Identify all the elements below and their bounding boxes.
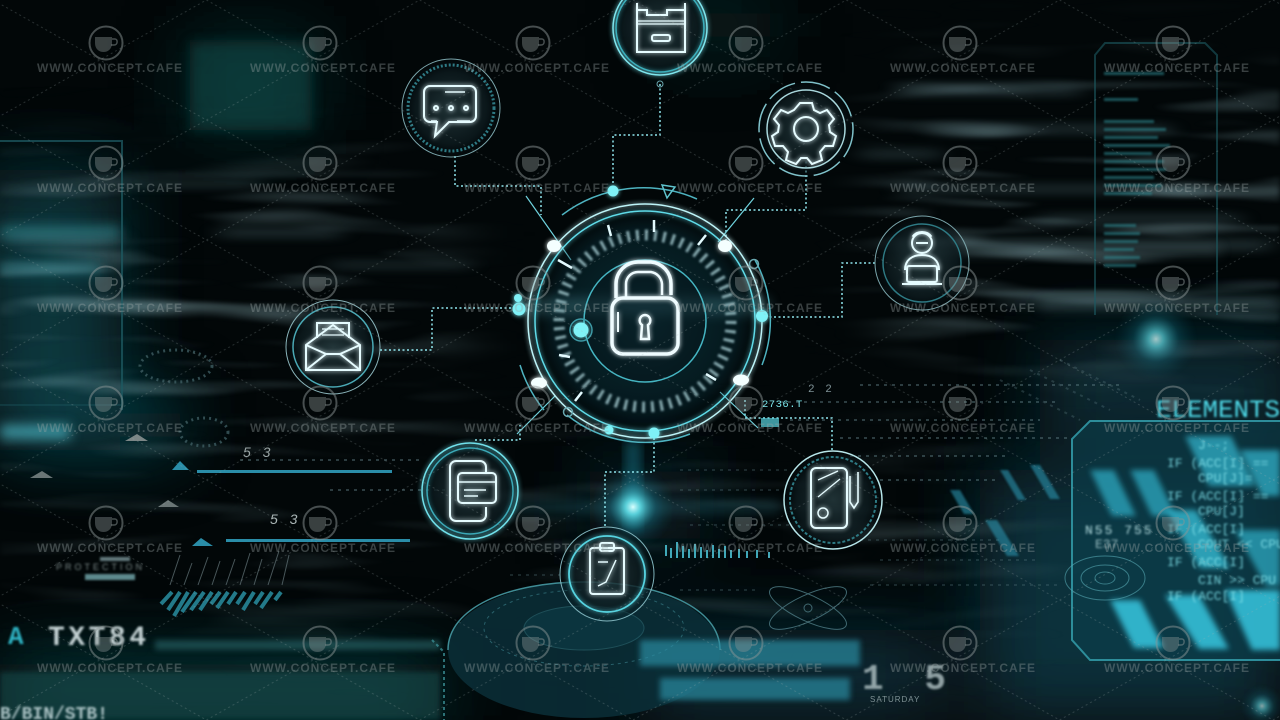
node: drawer cabinet icon	[611, 0, 709, 87]
watermark grid: WWW.CONCEPT.CAFE	[677, 181, 823, 195]
node: gear icon	[759, 82, 853, 176]
watermark grid: WWW.CONCEPT.CAFE	[250, 421, 396, 435]
watermark grid: WWW.CONCEPT.CAFE	[464, 301, 610, 315]
watermark grid: WWW.CONCEPT.CAFE	[37, 541, 183, 555]
code lines: CPU[J]	[1198, 504, 1245, 519]
horizontal glow streak	[520, 298, 770, 314]
outer rings	[528, 204, 762, 438]
chart: bottom bar strips	[640, 542, 860, 700]
code lines: IF (ACC[I]	[1167, 522, 1245, 537]
label: TXT84	[8, 622, 146, 654]
gauge: radial dial	[140, 350, 228, 446]
panel: top right code column	[1095, 43, 1217, 315]
watermark grid: WWW.CONCEPT.CAFE	[1104, 61, 1250, 75]
panel frame	[1072, 421, 1280, 660]
radar circles	[1065, 556, 1145, 600]
partial outer arcs	[520, 188, 770, 442]
panel: lower left gauges	[30, 350, 410, 616]
panel: left edge frame	[0, 141, 122, 410]
icon: atom outline	[764, 578, 852, 638]
connectors: dotted lines	[380, 84, 875, 526]
triangle marker	[662, 185, 675, 198]
watermark grid: WWW.CONCEPT.CAFE	[890, 301, 1036, 315]
watermark grid: WWW.CONCEPT.CAFE	[890, 421, 1036, 435]
lock icon	[612, 262, 678, 354]
node: phone with tools icon	[784, 451, 882, 549]
code lines: E37	[1095, 537, 1118, 552]
watermark grid: WWW.CONCEPT.CAFE	[1104, 301, 1250, 315]
watermark grid: WWW.CONCEPT.CAFE	[37, 301, 183, 315]
watermark grid: WWW.CONCEPT.CAFE	[250, 301, 396, 315]
watermark grid: WWW.CONCEPT.CAFE	[464, 541, 610, 555]
watermark grid: WWW.CONCEPT.CAFE	[37, 421, 183, 435]
code lines	[1085, 438, 1280, 604]
fine HUD readout rows lower middle	[240, 360, 1140, 590]
watermark grid: WWW.CONCEPT.CAFE	[677, 61, 823, 75]
watermark grid: WWW.CONCEPT.CAFE	[1104, 661, 1250, 675]
small open rings	[564, 260, 758, 416]
code lines: CIN >> CPU	[1198, 573, 1276, 588]
label: 15 Saturday: SATURDAY	[870, 695, 920, 704]
watermark grid: WWW.CONCEPT.CAFE	[250, 661, 396, 675]
watermark grid: WWW.CONCEPT.CAFE	[37, 61, 183, 75]
bar: upper blue	[197, 470, 392, 473]
code lines: IF (ACC[I] ==	[1167, 456, 1269, 471]
chart: thin spike ticks	[170, 551, 289, 585]
watermark grid: WWW.CONCEPT.CAFE	[37, 661, 183, 675]
code lines: IF (ACC[I]	[1167, 589, 1245, 604]
tick ring	[559, 235, 731, 407]
label: TXT84: A	[8, 622, 24, 652]
watermark grid: WWW.CONCEPT.CAFE	[250, 181, 396, 195]
watermark grid: WWW.CONCEPT.CAFE	[677, 421, 823, 435]
watermark grid: WWW.CONCEPT.CAFE	[1104, 181, 1250, 195]
readout: 2736.T	[761, 384, 834, 427]
code lines: CPU[J]=	[1198, 471, 1253, 486]
nodes: bright ovals	[531, 240, 749, 388]
chart: right slanted bars	[950, 465, 1060, 556]
watermark grid: WWW.CONCEPT.CAFE	[464, 181, 610, 195]
text: small 322 cluster	[56, 557, 145, 580]
panel: upper left green block	[190, 42, 312, 130]
watermark grid: WWW.CONCEPT.CAFE	[890, 61, 1036, 75]
watermark grid: WWW.CONCEPT.CAFE	[464, 61, 610, 75]
label: 53 upper: 5 3	[243, 444, 274, 460]
nodes: cyan dots	[512, 186, 768, 438]
node: person with laptop icon	[875, 216, 969, 310]
inner ring	[584, 260, 706, 382]
watermark grid: WWW.CONCEPT.CAFE	[1104, 421, 1250, 435]
watermark grid: WWW.CONCEPT.CAFE	[890, 181, 1036, 195]
central glow beam	[500, 440, 1280, 720]
watermark grid: WWW.CONCEPT.CAFE	[677, 541, 823, 555]
panel: bottom centre dome	[448, 582, 720, 718]
node: mail envelope icon	[286, 300, 380, 394]
watermark grid: WWW.CONCEPT.CAFE	[37, 181, 183, 195]
bar: lower blue	[226, 539, 410, 542]
readout: 2736.T: 2736.T	[762, 399, 803, 411]
slanted cyan bars	[1090, 436, 1280, 650]
chart: hatch ticks	[161, 592, 281, 616]
bright ticks	[558, 220, 716, 401]
watermark grid: WWW.CONCEPT.CAFE	[890, 541, 1036, 555]
text: small 322 cluster: PROTECTION	[56, 562, 145, 572]
readout: 2736.T: 2 2	[808, 384, 834, 396]
code lines: J--;	[1198, 438, 1229, 453]
central lock gauge	[512, 185, 770, 442]
node: clipboard icon	[560, 527, 654, 621]
label: 15 Saturday: 15	[862, 659, 946, 700]
panel: bottom left bar and block	[0, 640, 444, 720]
heading: ELEMENTS: ELEMENTS	[1156, 396, 1280, 425]
label: TXT84: TXT84	[48, 623, 146, 654]
code lines: IF (ACC[I]	[1167, 555, 1245, 570]
watermark grid: WWW.CONCEPT.CAFE	[677, 661, 823, 675]
triangles	[30, 434, 213, 546]
watermark grid: WWW.CONCEPT.CAFE	[464, 421, 610, 435]
panel: ELEMENTS code panel	[1065, 396, 1280, 660]
watermark grid: WWW.CONCEPT.CAFE	[464, 661, 610, 675]
watermark grid: WWW.CONCEPT.CAFE	[890, 661, 1036, 675]
node: chat icon	[402, 59, 500, 157]
code lines: IF (ACC[I] ==	[1167, 489, 1269, 504]
watermark grid: WWW.CONCEPT.CAFE	[250, 61, 396, 75]
label: 53 lower: 5 3	[270, 511, 301, 527]
watermark grid: WWW.CONCEPT.CAFE	[677, 301, 823, 315]
watermark grid: WWW.CONCEPT.CAFE	[1104, 541, 1250, 555]
node: phone with card icon	[422, 443, 518, 539]
glow: spark top right of scene	[1114, 297, 1198, 381]
watermark grid: WWW.CONCEPT.CAFE	[250, 541, 396, 555]
code lines: N55 755	[1085, 523, 1154, 538]
